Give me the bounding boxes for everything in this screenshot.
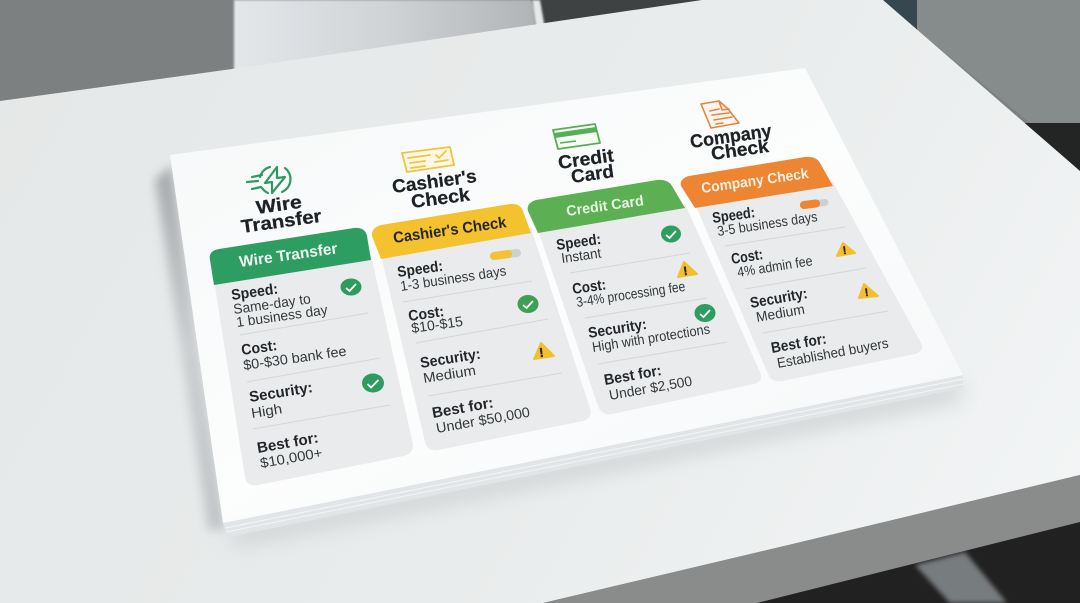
panel header: Wire Transfer: [238, 240, 339, 271]
row: cost: Cost:: [730, 246, 764, 268]
row: cost: $10-$15: [410, 313, 464, 336]
title: Credit: [557, 144, 615, 173]
row: best for: [256, 429, 324, 471]
panel header: [681, 157, 833, 208]
furniture right: [917, 0, 1080, 123]
icon: credit card: [553, 124, 600, 149]
row: best for: Established buyers: [776, 335, 890, 371]
title: Cashier's: [391, 165, 478, 197]
icon: document: [701, 101, 739, 128]
title: Company: [689, 120, 773, 152]
row: best for: Best for:: [256, 429, 320, 457]
row: security: Security:: [419, 346, 482, 372]
column: Company Check: [681, 101, 922, 381]
row: cost: Cost:: [571, 276, 607, 298]
panel header: [528, 180, 685, 233]
row: security: Security:: [587, 316, 648, 342]
row: best for: Best for:: [770, 330, 828, 357]
row: security: High with protections: [591, 321, 711, 355]
title: Check: [410, 183, 472, 212]
row: security: !: [538, 345, 545, 360]
title: Transfer: [240, 205, 323, 237]
title: Card: [570, 160, 615, 187]
row: security: Medium: [422, 362, 477, 386]
row: security: [587, 304, 716, 355]
column: Credit Card: [528, 124, 761, 414]
row: cost: [571, 262, 697, 310]
row: security: Medium: [755, 301, 806, 325]
row: cost: 3-4% processing fee: [575, 278, 686, 310]
row: security: Security:: [248, 379, 314, 406]
row: best for: Best for:: [603, 362, 663, 389]
row: cost: 4% admin fee: [736, 252, 814, 280]
icon: check: [402, 147, 454, 172]
panel header: [210, 228, 371, 285]
row: security: !: [864, 287, 869, 299]
row: best for: Under $2,500: [608, 373, 693, 403]
row: cost: !: [682, 264, 688, 278]
row: cost: Cost:: [240, 337, 278, 359]
row: speed: [230, 278, 362, 330]
panel header: [372, 204, 531, 259]
row: speed: Instant: [560, 245, 602, 266]
row: best for: $10,000+: [259, 444, 324, 471]
panel header: Company Check: [700, 166, 810, 197]
paper stack: [170, 68, 963, 537]
row: security: [419, 343, 554, 386]
row: security: Security:: [749, 285, 809, 312]
row: cost: $0-$30 bank fee: [242, 343, 348, 373]
panel body: [214, 255, 413, 485]
row: security: [749, 284, 878, 325]
title: [557, 144, 615, 187]
panel body: [695, 182, 922, 381]
icon: lightning bolt in circle: [247, 167, 291, 193]
table leg: [915, 552, 1007, 603]
row: speed: Speed:: [396, 258, 444, 281]
panel header: Cashier's Check: [392, 214, 508, 247]
title: [391, 165, 478, 212]
row: cost: [730, 243, 855, 280]
chair back left: [234, 0, 540, 90]
dark floor lower right: [700, 505, 1080, 603]
row: speed: [555, 226, 681, 266]
row: cost: !: [842, 245, 847, 257]
row: security: High: [250, 400, 283, 421]
row: cost: [407, 295, 538, 336]
column: Cashier's Check: [372, 147, 591, 450]
row: speed: Speed:: [230, 281, 279, 304]
column: Wire Transfer: [210, 167, 413, 485]
panel body: [538, 204, 761, 414]
table front edge: [543, 475, 1080, 603]
panel header: Credit Card: [565, 193, 645, 220]
row: best for: Best for:: [431, 394, 495, 422]
row: speed: Speed:: [711, 204, 756, 227]
title: Wire: [255, 191, 303, 218]
title: Check: [710, 135, 771, 164]
paper shadow: [155, 165, 962, 546]
row: speed: 1 business day: [235, 301, 329, 330]
row: security: [248, 374, 384, 421]
row: cost: Cost:: [407, 303, 445, 325]
row: speed: Same-day to: [232, 290, 312, 317]
row: speed: 1-3 business days: [399, 262, 507, 294]
title: [240, 191, 323, 237]
row: speed: Speed:: [555, 231, 602, 254]
row: best for: Under $50,000: [435, 404, 531, 436]
panel body: [381, 228, 591, 450]
row: speed: 3-5 business days: [716, 208, 818, 239]
